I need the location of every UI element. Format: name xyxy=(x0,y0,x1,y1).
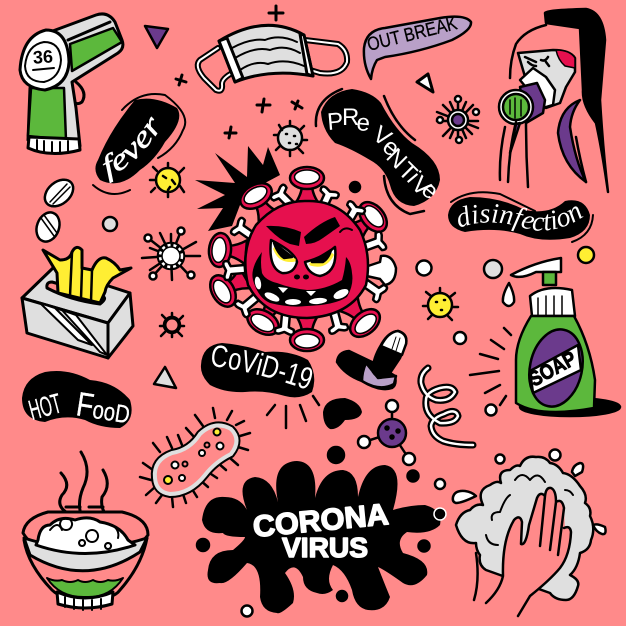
label blob: hot food: FooD xyxy=(74,385,133,431)
icon: hands washing with foam xyxy=(453,450,606,616)
label blob: disinfection: disinfection xyxy=(458,204,584,232)
label blob: fever xyxy=(92,93,186,195)
label blob: fever: fever xyxy=(102,116,158,184)
motion lines by soap xyxy=(470,328,511,405)
splat: corona virus: VIRUS xyxy=(282,532,368,563)
icon: soap dispenser: SOAP xyxy=(525,347,580,391)
label blob: hot food xyxy=(22,371,133,431)
figure: person in protective suit with respirator xyxy=(499,9,608,192)
label blob: preventive: PReVeNTiVe xyxy=(326,104,444,205)
central virus character xyxy=(195,146,396,351)
label blob: covid-19: CoViD-19 xyxy=(212,346,312,388)
speech bubble: outbreak: OUT BREAK xyxy=(365,13,460,56)
icon: bacterium xyxy=(140,408,250,507)
mouth xyxy=(252,252,352,307)
icon: starburst germ white xyxy=(142,228,200,280)
icon: soap dispenser xyxy=(511,258,620,416)
virus body xyxy=(245,201,368,318)
icon: tissue box xyxy=(22,247,133,358)
icon: bowl of hot food xyxy=(23,452,148,610)
small germs xyxy=(150,121,458,337)
icon: molecule xyxy=(358,400,415,465)
purple germ xyxy=(437,96,479,143)
icon: tablets xyxy=(33,174,78,245)
eyes xyxy=(270,240,335,276)
icon: white triangle xyxy=(417,74,433,92)
crown of spikes xyxy=(195,146,280,231)
icon: infrared thermometer xyxy=(20,14,123,154)
icon: purple triangle xyxy=(145,26,168,48)
brows and nose xyxy=(266,217,352,280)
label blob: hot food: HOT xyxy=(26,388,64,426)
splat: corona virus xyxy=(202,461,446,613)
grey triangle xyxy=(154,367,176,388)
plus marks xyxy=(176,6,302,138)
grey dot xyxy=(103,217,117,231)
icon: infrared thermometer: 36 xyxy=(32,47,53,68)
black ink blob xyxy=(323,398,362,429)
icon: spiral ribbon xyxy=(421,368,473,445)
icon: face mask xyxy=(198,25,347,91)
splat: corona virus: CORONA xyxy=(252,498,390,544)
icon: capsule xyxy=(337,331,406,389)
speech bubble: outbreak xyxy=(364,13,471,79)
scattered dots xyxy=(197,182,594,616)
lines under covid label xyxy=(267,396,319,428)
virus spikes xyxy=(205,167,396,351)
